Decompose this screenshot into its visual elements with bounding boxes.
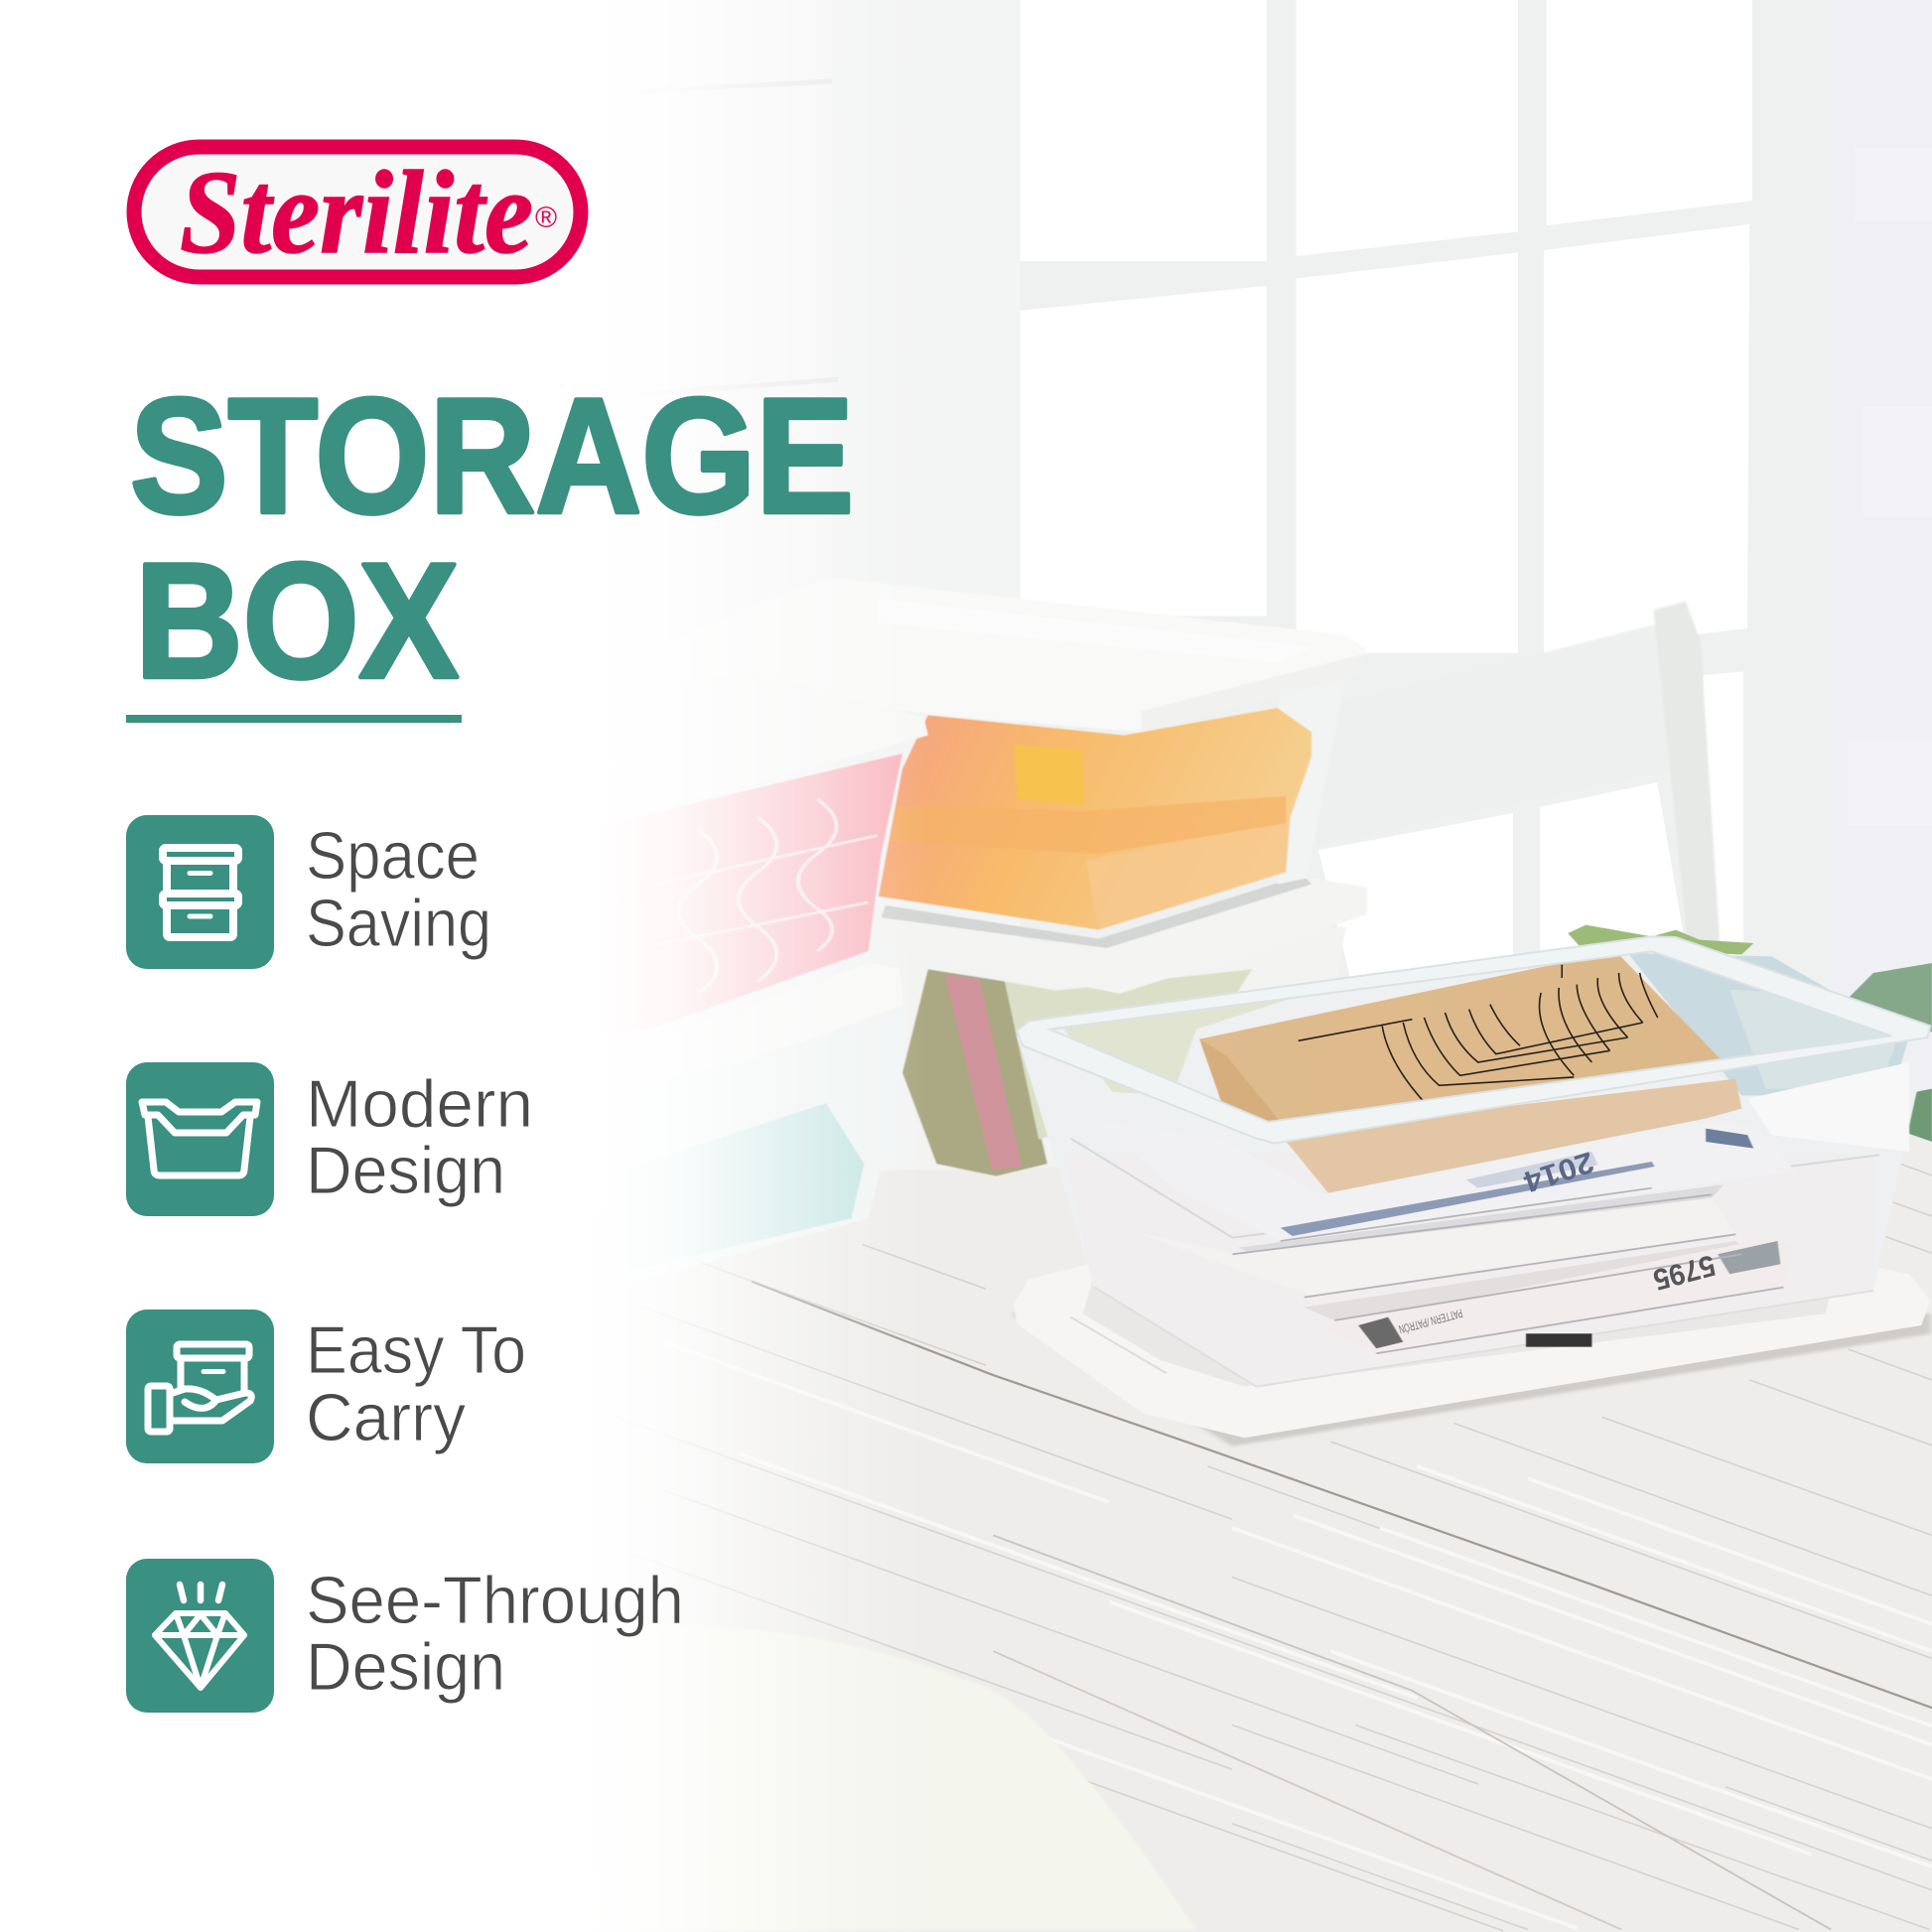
feature: Space Saving: [126, 815, 491, 969]
label: Modern Design: Modern: [306, 1066, 533, 1142]
label: Modern Design: Design: [306, 1133, 505, 1208]
white lid under the box: [1014, 1261, 1930, 1438]
middle box with floral fabric: [873, 875, 1367, 1175]
label: Space Saving: Space: [306, 818, 480, 894]
top box with orange fabric: [621, 577, 1367, 930]
feature: Modern Design: [126, 1062, 533, 1216]
icon: hand holding box: [126, 1310, 274, 1463]
lower left box with teal fabric: [596, 963, 936, 1286]
label: Modern Design: [306, 1066, 533, 1208]
feature: Easy To Carry: [126, 1310, 526, 1463]
icon: diamond: [126, 1559, 274, 1713]
title underline: [126, 715, 462, 723]
label: Easy To Carry: Easy To: [306, 1312, 526, 1388]
icon: stacked boxes: [126, 815, 274, 969]
newspaper print: 2014: 2014: [1519, 1145, 1597, 1198]
wall and window scene: [592, 0, 1932, 1232]
brand logo: Sterilite: Sterilite: [180, 146, 533, 278]
title: Storage Box: BOX: [135, 529, 459, 712]
label: Space Saving: [306, 818, 491, 961]
brand logo: Sterilite: ®: [535, 202, 557, 234]
stacked background boxes: [596, 577, 1367, 1286]
clear box rim: [1017, 936, 1930, 1144]
title: Storage Box: [130, 364, 854, 712]
label: Easy To Carry: Carry: [306, 1380, 466, 1455]
newspaper print: 5795: 5795: [1650, 1248, 1719, 1296]
background photo: wall, window and table: [592, 0, 1932, 1932]
soft shadow under the lid: [1011, 1313, 1931, 1447]
label: See-Through Design: [306, 1563, 684, 1705]
label: See-Through Design: Design: [306, 1629, 505, 1705]
icon: lidded container: [126, 1062, 274, 1216]
label: See-Through Design: See-Through: [306, 1563, 684, 1638]
stacked newspapers: [1101, 1122, 1796, 1353]
feature: See-Through Design: [126, 1559, 684, 1713]
dining chair in background: [1315, 602, 1721, 949]
pink patterned box on the left: [596, 671, 928, 1034]
front clear box with patterns and newspapers: [1011, 925, 1932, 1447]
printed pattern lines: [1299, 965, 1658, 1102]
cream chair in foreground: [592, 1626, 1196, 1930]
title: Storage Box: STORAGE: [130, 364, 854, 547]
folded kraft pattern paper: [1199, 951, 1741, 1193]
table top: [592, 1128, 1932, 1932]
newspaper print: Pattern: PATTERN /PATRÓN: [1397, 1307, 1464, 1337]
label: Easy To Carry: [306, 1312, 526, 1455]
clear box body: [1017, 936, 1930, 1387]
plants behind the box: [1568, 925, 1932, 1142]
label: Space Saving: Saving: [306, 886, 491, 961]
